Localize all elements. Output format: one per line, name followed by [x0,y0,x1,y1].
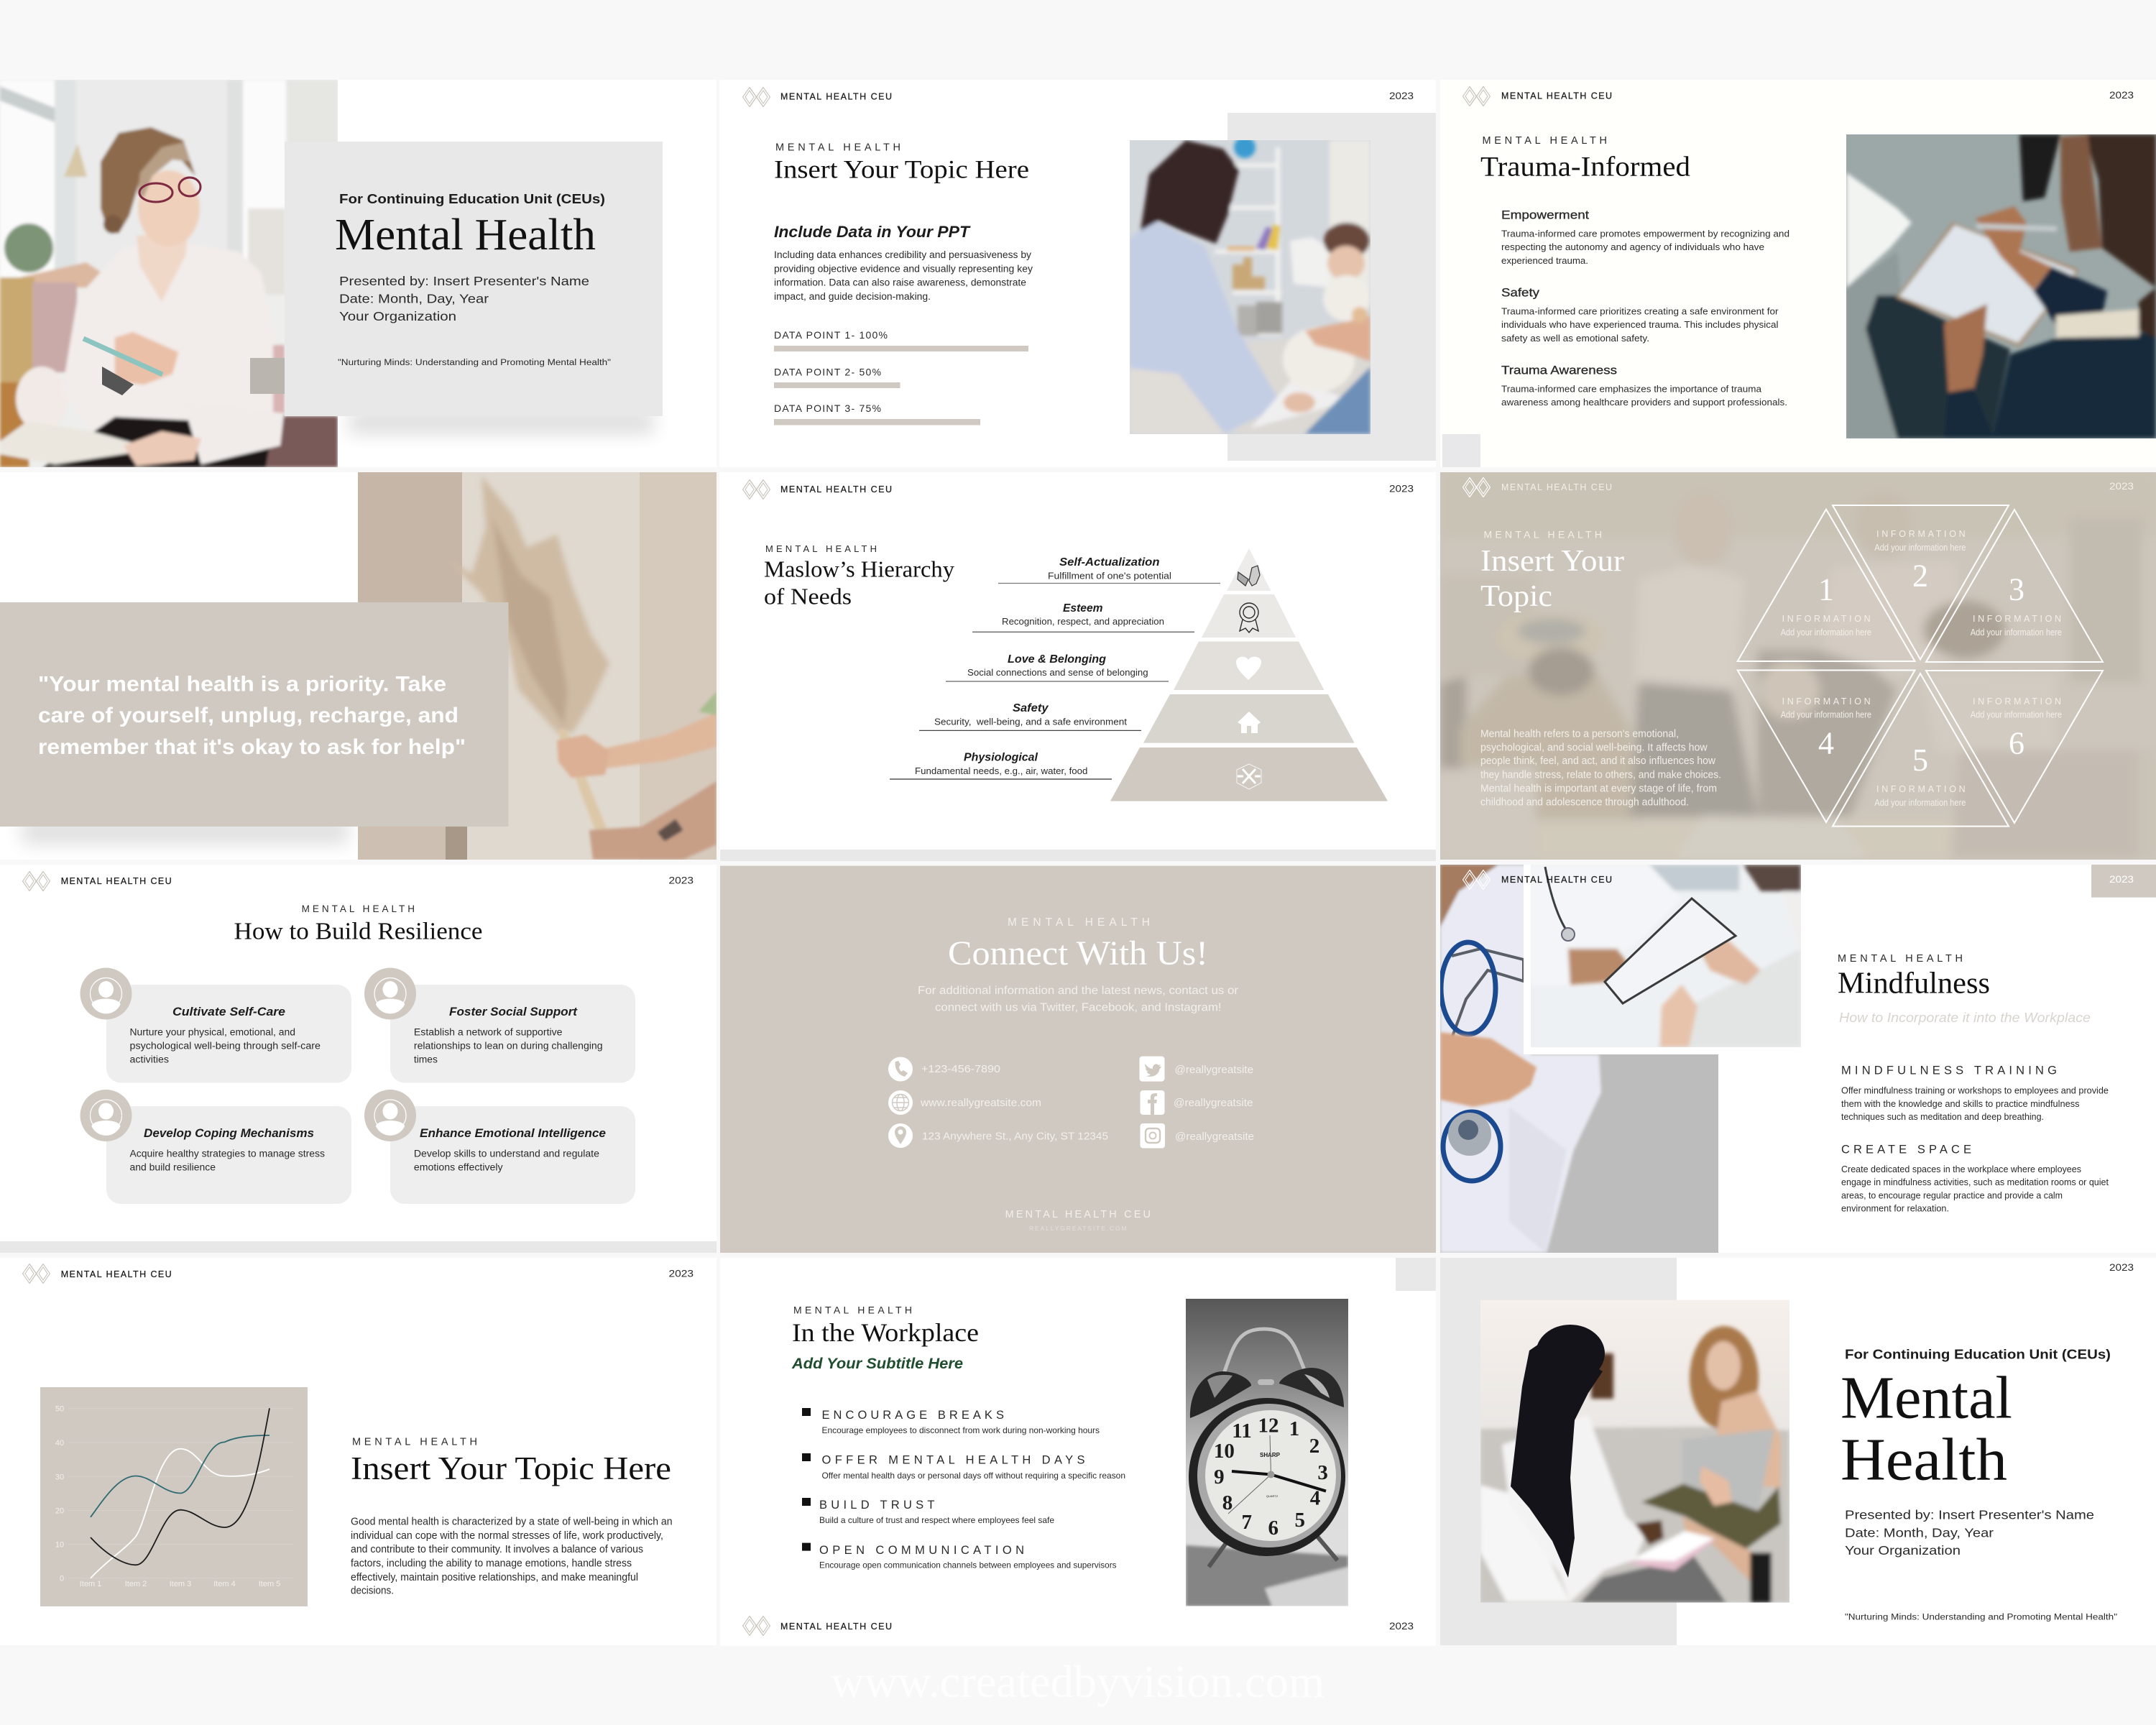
label: self-actualization [998,556,1220,584]
bar chart: data points [774,329,1028,426]
logo [1463,870,1612,890]
text block: mindfulness training [1841,1064,2109,1122]
logo: MENTAL HEALTH CEU [1501,91,1612,101]
watermark: www.createdbyvision.com [831,1656,1325,1707]
text block: create space: CREATE SPACE [1841,1144,1971,1156]
logo: MENTAL HEALTH CEU [61,1269,172,1279]
footer brand [1005,1209,1151,1232]
body text: Including data enhances credibility and persuasiveness by [774,249,1031,260]
presenter details [339,274,589,323]
triangle 6: 6 [2009,726,2024,761]
text block: create space: areas, to encourage regular practice and provide a calm [1841,1190,2063,1200]
text block: create space: environment for relaxation. [1841,1204,1949,1214]
heading [234,903,483,944]
heading [1480,529,1624,613]
body text: psychological, and social well-being. It affects how [1480,741,1708,753]
triangle 4: Add your information here [1781,710,1871,720]
panel: slide 1 title [0,80,717,467]
panel: quote card [0,602,509,827]
photo: woman with glasses and notebook [0,80,338,467]
icon: house [1238,712,1261,733]
body text [351,1516,673,1597]
heading: Add Your Subtitle Here [791,1356,963,1372]
icon: fork and knife [1237,764,1261,789]
card: cultivate self-care [80,967,351,1082]
tagline: "Nurturing Minds: Understanding and Promoting Mental Health" [1845,1613,2117,1622]
presenter details: Date: Month, Day, Year [1845,1526,1994,1540]
eyebrow: For Continuing Education Unit (CEUs) [339,192,605,206]
year: 2023 [2109,480,2134,492]
triangle 2: 2 [1912,558,1928,594]
line chart: 20 [55,1506,64,1515]
text block: empowerment: experienced trauma. [1501,255,1588,266]
label: esteem: Recognition, respect, and appreciation [1002,617,1164,627]
logo: MENTAL HEALTH CEU [780,92,892,102]
panel: slide 3 trauma-informed [1440,80,2156,467]
year badge [2091,865,2156,898]
contact: address [888,1123,1108,1148]
intro text: For additional information and the latest news, contact us or [918,985,1238,997]
logo [23,1264,172,1284]
list item: build trust [802,1498,1054,1525]
triangle 5: INFORMATION [1876,784,1966,794]
line chart: 40 [55,1439,64,1448]
contact: website [888,1090,1041,1115]
logo: MENTAL HEALTH CEU [1501,875,1612,885]
photo: pampas grass [358,472,717,860]
icon: butterfly [1238,566,1260,586]
photo: alarm clock [1186,1299,1348,1606]
card: foster social support: times [414,1054,438,1065]
title: Health [1841,1427,2007,1494]
body text: childhood and adolescence through adulthood. [1480,796,1689,809]
triangle 3: Add your information here [1971,627,2062,638]
text block: mindfulness training: them with the knowledge and skills to practice mindfulness [1841,1099,2080,1109]
logo [1463,477,1612,497]
body text: information. Data can also raise awareness, demonstrate [774,277,1026,288]
heading [948,916,1208,972]
photo: faded office team background [1440,472,2156,860]
body text: Good mental health is characterized by a state of well-being in which an [351,1516,673,1528]
line chart: Item 4 [213,1580,236,1588]
intro text: connect with us via Twitter, Facebook, and Instagram! [935,1001,1222,1013]
photo: alarm clock: 6 [1268,1517,1279,1540]
card: cultivate self-care: psychological well-being through self-care [129,1041,321,1052]
panel: slide 6 insert your topic [1440,472,2156,860]
text block: safety: safety as well as emotional safety. [1501,333,1649,344]
logo [1463,86,1612,106]
card: develop coping mechanisms: Develop Coping Mechanisms [144,1126,314,1140]
photo: therapist with child [1130,137,1370,434]
heading: Insert Your [1480,545,1624,578]
text block: trauma awareness: awareness among healthcare providers and support professionals. [1501,397,1787,408]
label: esteem: Esteem [1063,602,1102,615]
heading: MENTAL HEALTH [775,142,900,154]
line chart: Item 3 [170,1580,191,1588]
text block: safety: Trauma-informed care prioritizes creating a safe environment for [1501,306,1779,316]
line chart: 30 [55,1473,64,1482]
title: Mental [1841,1365,2012,1432]
body text: factors, including the ability to manage emotions, handle stress [351,1557,632,1569]
heading: Maslow’s Hierarchy [764,556,954,582]
footer brand: REALLYGREATSITE.COM [1029,1225,1127,1232]
label: love and belonging [946,653,1169,681]
icon: person [80,1090,132,1141]
subheading: Include Data in Your PPT [774,223,971,241]
label: love and belonging: Love & Belonging [1008,653,1106,666]
triangle 3 [1926,510,2103,662]
photo: alarm clock: 3 [1317,1461,1328,1484]
text block: empowerment: Empowerment [1501,209,1589,222]
text block: safety: individuals who have experienced trauma. This includes physical [1501,319,1779,330]
heading [1838,953,2091,1025]
chart: pyramid [1110,548,1388,801]
photo: alarm clock: 11 [1232,1420,1252,1443]
card: foster social support: relationships to lean on during challenging [414,1041,603,1052]
logo: MENTAL HEALTH CEU [61,876,172,886]
year: 2023 [1389,1620,1414,1632]
logo: MENTAL HEALTH CEU [1501,482,1612,492]
year: 2023 [2109,1261,2134,1273]
triangle 5: Add your information here [1874,798,1966,808]
body text: individual can cope with the normal stresses of life, work productively, [351,1530,663,1542]
photo: doctor with stethoscope [1440,865,1718,1253]
text block: trauma awareness: Trauma Awareness [1501,364,1617,377]
text block: mindfulness training: Offer mindfulness training or workshops to employees and provide [1841,1085,2109,1095]
icon: person [80,967,132,1019]
panel: slide 7 build resilience [0,865,717,1253]
social: twitter [1140,1057,1253,1082]
presenter details: Date: Month, Day, Year [339,291,489,305]
heading: Topic [1480,580,1552,613]
heading: How to Incorporate it into the Workplace [1839,1011,2091,1025]
heading: MENTAL HEALTH [793,1304,912,1315]
heading: How to Build Resilience [234,918,483,944]
card: develop coping mechanisms: Acquire healthy strategies to manage stress [129,1149,325,1159]
heading [351,1437,671,1486]
year: 2023 [2109,89,2134,101]
presenter details: Your Organization [1845,1543,1961,1558]
line chart: Item 5 [259,1580,280,1588]
panel: quote card: care of yourself, unplug, recharge, and [38,704,459,727]
panel: slide 11 in the workplace [720,1258,1436,1646]
presenter details: Presented by: Insert Presenter's Name [1845,1508,2094,1522]
list item: open communication: OPEN COMMUNICATION [819,1544,1024,1557]
card: cultivate self-care: Nurture your physical, emotional, and [129,1026,295,1037]
triangle 6: Add your information here [1971,710,2062,720]
text block: create space: Create dedicated spaces in the workplace where employees [1841,1164,2081,1174]
panel: title card [285,142,663,416]
presenter details [1845,1508,2094,1558]
panel: slide 2 include data [719,80,1436,467]
label: physiological: Fundamental needs, e.g., air, water, food [915,766,1087,776]
logo: MENTAL HEALTH CEU [780,1622,892,1632]
photo: alarm clock: 2 [1309,1435,1319,1458]
text block: mindfulness training: techniques such as meditation and deep breathing. [1841,1112,2044,1122]
triangle 6 [1926,671,2103,823]
triangle 5 [1833,673,2009,827]
list item: encourage breaks: ENCOURAGE BREAKS [822,1409,1004,1422]
panel: quote card: "Your mental health is a priority. Take [38,672,446,696]
logo [743,480,892,499]
text block: trauma awareness: Trauma-informed care emphasizes the importance of trauma [1501,383,1762,394]
triangle 4 [1738,670,1915,822]
text block: create space [1841,1144,2109,1214]
triangle 2 [1833,505,2009,660]
line chart [40,1387,308,1606]
body text [1480,727,1721,809]
title: Mental Health [335,211,596,259]
panel: slide 12 closing title [1440,1258,2156,1645]
label: self-actualization: Self-Actualization [1059,556,1160,569]
text block: empowerment [1501,209,1789,266]
year: 2023 [668,875,694,886]
body text: decisions. [351,1585,394,1597]
card: develop coping mechanisms: and build resilience [129,1162,216,1173]
contact: phone [888,1057,1000,1081]
footer brand: MENTAL HEALTH CEU [1005,1209,1151,1220]
body text: effectively, maintain positive relationships, and make meaningful [351,1571,638,1583]
list item: encourage breaks [802,1408,1100,1435]
heading: MENTAL HEALTH [302,903,415,914]
photo: alarm clock: 5 [1294,1509,1305,1532]
tagline: "Nurturing Minds: Understanding and Promoting Mental Health" [338,359,611,367]
card: foster social support [364,967,635,1082]
line chart: Item 2 [125,1580,147,1588]
heading [1480,135,1691,183]
body text [774,249,1033,302]
heading: MENTAL HEALTH [1838,953,1963,965]
triangle 3: 3 [2009,572,2024,607]
heading [791,1304,979,1372]
heading: Insert Your Topic Here [351,1450,671,1486]
year: 2023 [1389,90,1414,101]
panel: slide 5 Maslow's hierarchy [719,472,1436,861]
photo: alarm clock: 1 [1289,1417,1299,1440]
triangle 6: INFORMATION [1973,696,2061,707]
list item: open communication [802,1543,1117,1570]
body text: Mental health is important at every stage of life, from [1480,782,1717,794]
bar chart: data points: DATA POINT 1- 100% [774,329,888,341]
label: safety [919,702,1141,730]
year: 2023 [668,1268,694,1279]
photo: clipboard consultation [1531,865,1801,1047]
photo: alarm clock: 10 [1214,1440,1235,1463]
card: enhance emotional intelligence: Enhance Emotional Intelligence [420,1126,606,1140]
heading: MENTAL HEALTH [1008,916,1150,929]
triangle 4: 4 [1818,726,1834,761]
line chart: 50 [55,1404,64,1413]
logo [23,871,172,891]
triangle 4: INFORMATION [1782,696,1871,707]
bar chart: data points: DATA POINT 3- 75% [774,402,881,414]
card: enhance emotional intelligence: emotions effectively [414,1162,503,1173]
card: foster social support: Foster Social Support [449,1005,578,1018]
bar chart: data points: DATA POINT 2- 50% [774,367,881,378]
heading: MENTAL HEALTH [1482,135,1607,147]
logo [743,1616,892,1636]
body text: they handle stress, relate to others, and make choices. [1480,769,1721,781]
card: cultivate self-care: activities [129,1054,169,1065]
contact: phone: +123-456-7890 [921,1063,1000,1075]
list item: open communication: Encourage open communication channels between employees and supervisors [819,1560,1117,1570]
heading: of Needs [764,584,852,610]
heading: MENTAL HEALTH [765,543,877,554]
triangle 1: INFORMATION [1782,614,1871,624]
social: instagram [1140,1123,1254,1149]
heading: Connect With Us! [948,934,1208,972]
label: esteem [972,602,1194,632]
photo: counselling session [1480,1300,1789,1603]
text block: safety: Safety [1501,286,1540,299]
intro text [918,985,1238,1013]
icon: heart [1236,657,1261,680]
triangle 3: INFORMATION [1973,614,2061,624]
line chart: 0 [60,1574,64,1583]
triangle 1: 1 [1818,572,1834,607]
triangle 2: Add your information here [1874,543,1966,553]
text block: create space: engage in mindfulness activities, such as meditation rooms or quiet [1841,1177,2109,1187]
list item: offer mental health days: Offer mental health days or personal days off without requiring a specific reason [822,1471,1125,1481]
body text: people think, feel, and act, and it also influences how [1480,755,1715,767]
list item: offer mental health days: OFFER MENTAL HEALTH DAYS [822,1454,1085,1467]
body text: providing objective evidence and visually representing key [774,263,1033,275]
photo: alarm clock: 7 [1241,1511,1252,1534]
card: develop coping mechanisms [80,1090,351,1204]
photo: alarm clock: 4 [1310,1486,1320,1509]
triangle 1: Add your information here [1781,627,1871,638]
heading [764,543,954,610]
panel: slide 9 mindfulness [1440,865,2156,1253]
triangle 1 [1738,510,1915,661]
social: facebook [1140,1090,1253,1115]
heading: MENTAL HEALTH [1483,529,1602,540]
heading: Insert Your Topic Here [774,155,1029,184]
contact: address: 123 Anywhere St., Any City, ST 12345 [922,1131,1108,1143]
label: love and belonging: Social connections and sense of belonging [967,668,1148,678]
heading: Trauma-Informed [1480,152,1691,183]
text block: empowerment: Trauma-informed care promotes empowerment by recognizing and [1501,229,1789,239]
photo: alarm clock: SHARP [1260,1452,1281,1458]
icon: ribbon [1240,603,1258,632]
social: instagram: @reallygreatsite [1175,1131,1254,1143]
body text: impact, and guide decision-making. [774,291,931,302]
label: physiological: Physiological [964,752,1038,764]
label: physiological [890,752,1112,779]
label: safety: Safety [1013,702,1049,714]
photo: alarm clock: 9 [1214,1466,1225,1489]
text block: safety [1501,286,1779,344]
card: enhance emotional intelligence [364,1090,635,1204]
heading: Mindfulness [1838,967,1990,1000]
text block: mindfulness training: MINDFULNESS TRAINING [1841,1064,2057,1077]
card: foster social support: Establish a network of supportive [414,1026,562,1037]
title [1841,1365,2012,1494]
label: self-actualization: Fulfillment of one's potential [1048,571,1171,581]
eyebrow: For Continuing Education Unit (CEUs) [1845,1348,2111,1362]
body text: and contribute to their community. It involves a balance of various [351,1543,643,1555]
text block: trauma awareness [1501,364,1787,408]
triangle 2: INFORMATION [1876,529,1966,539]
list item: build trust: Build a culture of trust and respect where employees feel safe [819,1515,1054,1525]
presenter details: Presented by: Insert Presenter's Name [339,274,589,288]
year: 2023 [1389,483,1414,494]
contact: website: www.reallygreatsite.com [920,1097,1041,1109]
photo: alarm clock: QUARTZ [1266,1494,1279,1498]
panel: quote card: remember that it's okay to ask for help" [38,735,466,759]
social: twitter: @reallygreatsite [1174,1064,1253,1076]
photo: writing on clipboard [1846,134,2156,438]
photo: alarm clock: 12 [1258,1414,1279,1438]
heading [774,142,1029,184]
panel: slide 4 quote [0,472,717,860]
card: enhance emotional intelligence: Develop skills to understand and regulate [414,1149,599,1159]
panel: slide 10 line chart [0,1258,717,1645]
heading: MENTAL HEALTH [352,1437,477,1448]
logo: MENTAL HEALTH CEU [780,484,892,494]
presenter details: Your Organization [339,309,456,323]
triangle 5: 5 [1912,742,1928,778]
icon: person [364,1090,416,1141]
line chart: Item 1 [80,1580,101,1588]
year badge: 2023 [2109,873,2134,885]
heading: In the Workplace [792,1318,979,1347]
list item: encourage breaks: Encourage employees to disconnect from work during non-working hours [822,1425,1100,1435]
body text: Mental health refers to a person's emotional, [1480,727,1679,740]
label: safety: Security, well-being, and a safe environment [934,717,1128,727]
card: cultivate self-care: Cultivate Self-Care [172,1005,285,1018]
panel: slide 8 connect with us [720,866,1436,1253]
list item: build trust: BUILD TRUST [819,1499,934,1512]
text block: empowerment: respecting the autonomy and agency of individuals who have [1501,242,1764,252]
logo [743,88,892,106]
list item: offer mental health days [802,1453,1125,1481]
line chart: 10 [55,1541,64,1550]
icon: person [364,967,416,1019]
social: facebook: @reallygreatsite [1174,1097,1253,1109]
photo: alarm clock: 8 [1222,1491,1233,1514]
